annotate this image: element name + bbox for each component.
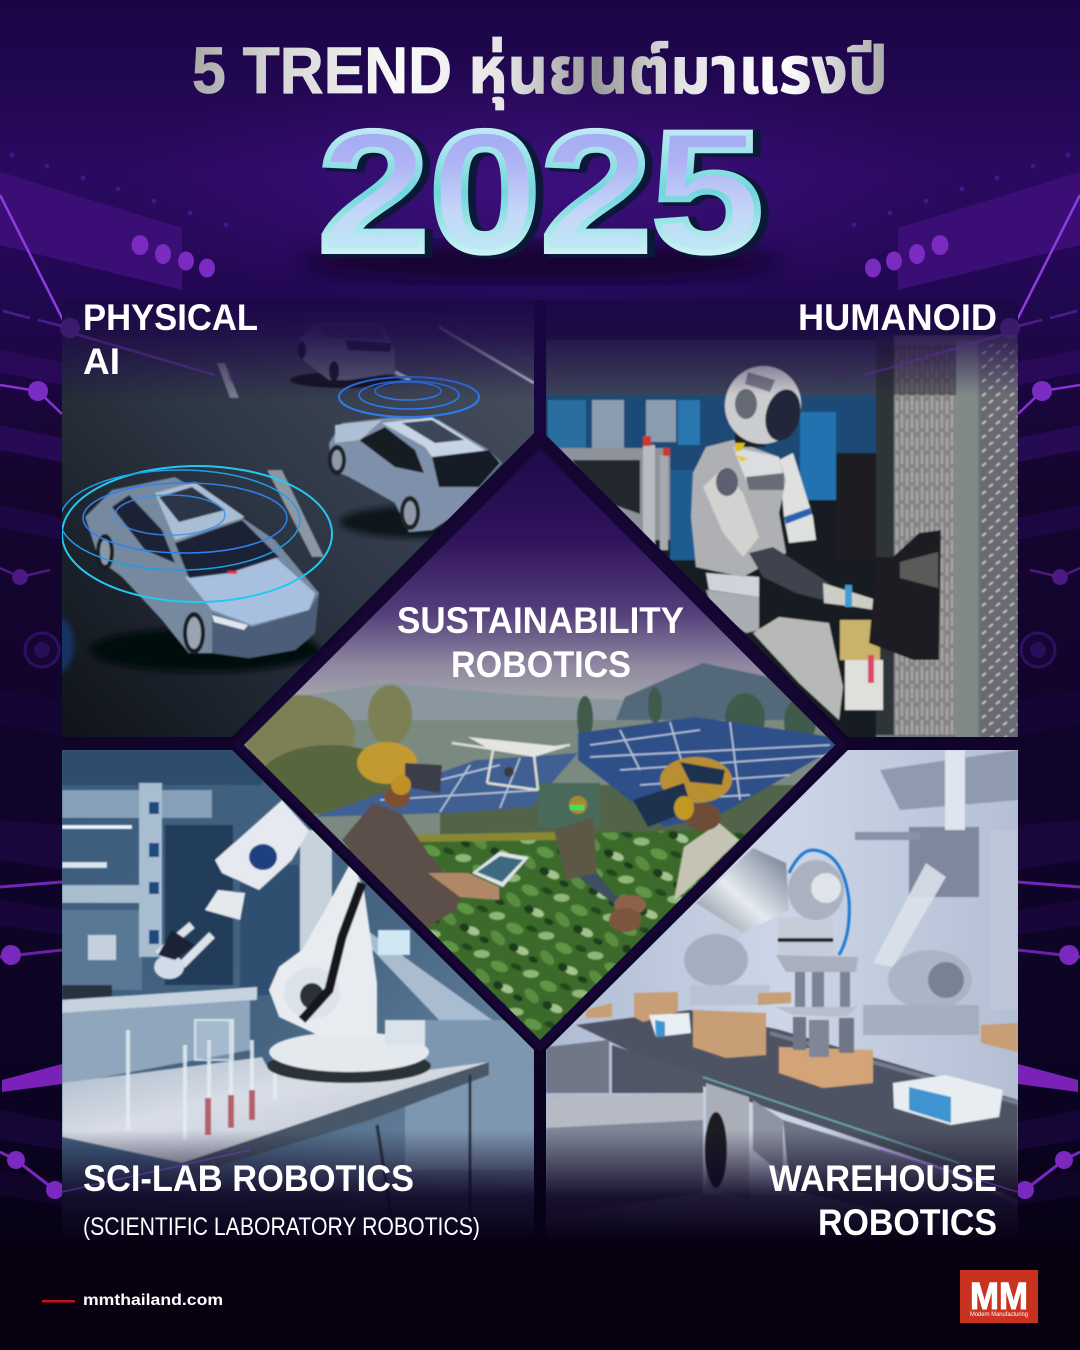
title: 5 TREND หุ่นยนต์มาแรงปี: หุ่นยนต์มาแรงปี bbox=[468, 33, 888, 110]
label: sustainability robotics: ROBOTICS bbox=[451, 644, 631, 685]
gripper arm bbox=[696, 848, 858, 1057]
label: physical AI: PHYSICAL bbox=[83, 297, 258, 338]
title: 5 TREND หุ่นยนต์มาแรงปี: 5 TREND bbox=[192, 33, 452, 107]
year 2025: 2025 bbox=[318, 96, 763, 288]
test tubes bbox=[128, 1020, 275, 1140]
label: warehouse robotics: WAREHOUSE bbox=[769, 1158, 997, 1199]
gate wall bbox=[876, 335, 1018, 740]
label: humanoid: HUMANOID bbox=[798, 297, 997, 338]
trees bbox=[245, 685, 412, 815]
label: sci-lab robotics: SCI-LAB ROBOTICS bbox=[83, 1158, 414, 1199]
lower conveyor frame bbox=[546, 1040, 995, 1202]
robot bbox=[690, 365, 874, 721]
label: sci-lab robotics bbox=[83, 1158, 480, 1241]
label: warehouse robotics: ROBOTICS bbox=[818, 1202, 997, 1243]
car: far bbox=[290, 336, 400, 389]
white packages bbox=[649, 1013, 1003, 1125]
car: front with sensor rings bbox=[85, 477, 320, 672]
logo: MM Modern Manufacturing bbox=[960, 1270, 1038, 1323]
person: right with tablet bbox=[578, 757, 739, 932]
robot arm bbox=[154, 800, 431, 1083]
label: physical AI: AI bbox=[83, 341, 120, 382]
crop field bbox=[420, 830, 747, 1040]
person: back bbox=[554, 796, 597, 880]
panel: sci-lab robotics bbox=[62, 750, 534, 1240]
panel: warehouse robotics bbox=[546, 750, 1018, 1240]
panel: sustainability robotics bbox=[232, 449, 860, 1045]
person: left with tablet bbox=[342, 742, 529, 927]
logo: MM Modern Manufacturing: Modern Manufacturing bbox=[970, 1312, 1028, 1318]
panel: humanoid bbox=[546, 300, 1018, 740]
label: sci-lab robotics: (SCIENTIFIC LABORATORY ROBOTICS) bbox=[83, 1213, 480, 1241]
sensor rings bbox=[62, 328, 480, 676]
part on gate bbox=[869, 530, 941, 660]
website footer: mmthailand.com bbox=[83, 1292, 223, 1309]
car: middle bbox=[328, 417, 502, 538]
year 2025: 2025 bbox=[324, 98, 769, 290]
label: sustainability robotics: SUSTAINABILITY bbox=[397, 600, 684, 641]
cardboard boxes bbox=[586, 992, 1018, 1088]
diamond gap frame bbox=[232, 433, 848, 1052]
drone bbox=[452, 737, 570, 790]
logo: MM Modern Manufacturing: MM bbox=[970, 1276, 1028, 1318]
panel: physical AI bbox=[26, 300, 534, 740]
left machine rack bbox=[560, 436, 670, 555]
overlay lines across photos bbox=[60, 318, 1020, 1192]
solar panels bbox=[314, 717, 837, 827]
